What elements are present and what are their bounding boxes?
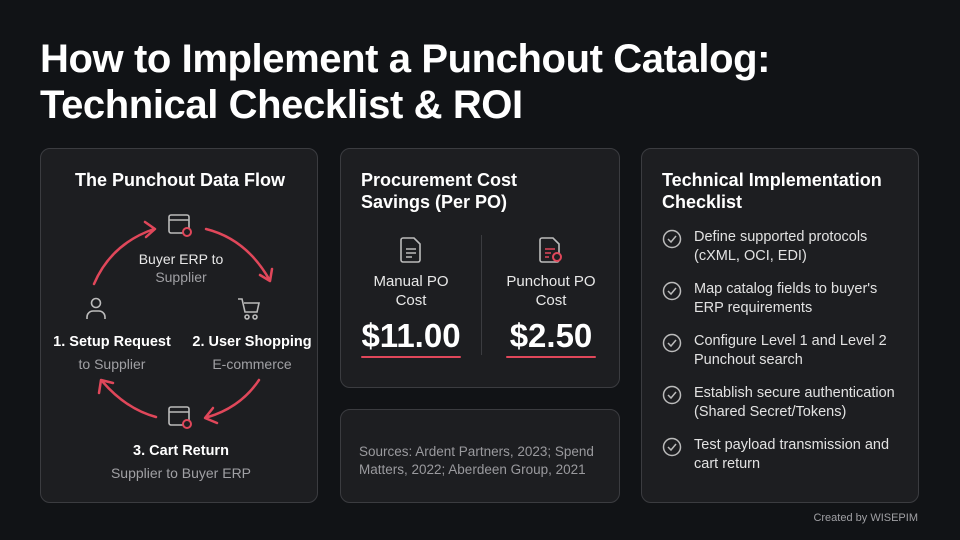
text: step 1 — [53, 334, 171, 372]
heading: data flow: The Punchout Data Flow — [75, 170, 285, 190]
manual cost block: Manual PO — [373, 273, 449, 290]
title: Technical Checklist & ROI — [40, 83, 523, 127]
heading: cost savings: Procurement Cost — [361, 170, 517, 190]
item 2: Map catalog fields to buyer's — [694, 281, 877, 297]
item 5: cart return — [694, 456, 760, 472]
text: step 1: to Supplier — [79, 356, 145, 372]
punchout cost block: $2.50 — [510, 317, 592, 354]
title: How to Implement a Punchout Catalog: — [40, 37, 770, 81]
manual cost block — [361, 237, 461, 358]
heading: checklist: Checklist — [662, 192, 742, 212]
item 5 — [662, 437, 889, 472]
cycle arrows — [92, 220, 274, 424]
punchout cost block: Cost — [536, 292, 566, 309]
text: buyer erp to supplier: Supplier — [155, 269, 207, 285]
item 4: (Shared Secret/Tokens) — [694, 404, 846, 420]
text: step 2: 2. User Shopping — [192, 334, 312, 350]
item 5: Test payload transmission and — [694, 437, 889, 453]
item 1 — [662, 229, 867, 264]
icon: document red — [539, 237, 562, 263]
icon: document — [400, 237, 421, 263]
panel: sources — [340, 409, 620, 503]
item 1: Define supported protocols — [694, 229, 867, 245]
text: buyer erp to supplier: Buyer ERP to — [139, 251, 223, 267]
item 2: ERP requirements — [694, 300, 812, 316]
icon: browser bottom — [168, 406, 192, 429]
heading: cost savings — [361, 170, 517, 212]
text: step 3: 3. Cart Return — [133, 443, 229, 459]
icon: browser top — [168, 214, 192, 237]
item 3 — [662, 333, 887, 368]
manual cost block: Cost — [396, 292, 426, 309]
item 2 — [662, 281, 877, 316]
item 3: Punchout search — [694, 352, 803, 368]
panel: checklist — [641, 148, 919, 503]
item 4 — [662, 385, 895, 420]
text: step 3 — [111, 443, 251, 481]
panel: data flow — [40, 148, 318, 503]
heading: checklist: Technical Implementation — [662, 170, 882, 190]
item 4: Establish secure authentication — [694, 385, 895, 401]
item 1: (cXML, OCI, EDI) — [694, 248, 807, 264]
heading: cost savings: Savings (Per PO) — [361, 192, 507, 212]
text: buyer erp to supplier — [139, 251, 223, 285]
text: step 2: E-commerce — [212, 356, 292, 372]
text: step 3: Supplier to Buyer ERP — [111, 465, 251, 481]
punchout cost block: Punchout PO — [506, 273, 596, 290]
text: sources: Sources: Ardent Partners, 2023; Spend Matters, 2022; Aberdeen Group, 2021 — [359, 444, 594, 477]
footer credit: Created by WISEPIM — [813, 512, 918, 524]
icon: cart — [238, 298, 260, 320]
title — [40, 37, 770, 127]
text: step 1: 1. Setup Request — [53, 334, 171, 350]
item 3: Configure Level 1 and Level 2 — [694, 333, 887, 349]
panel: cost savings — [340, 148, 620, 388]
punchout cost block — [506, 237, 596, 358]
manual cost block: $11.00 — [361, 317, 461, 354]
text: step 2 — [192, 334, 312, 372]
heading: checklist — [662, 170, 882, 212]
icon: user — [86, 298, 106, 319]
